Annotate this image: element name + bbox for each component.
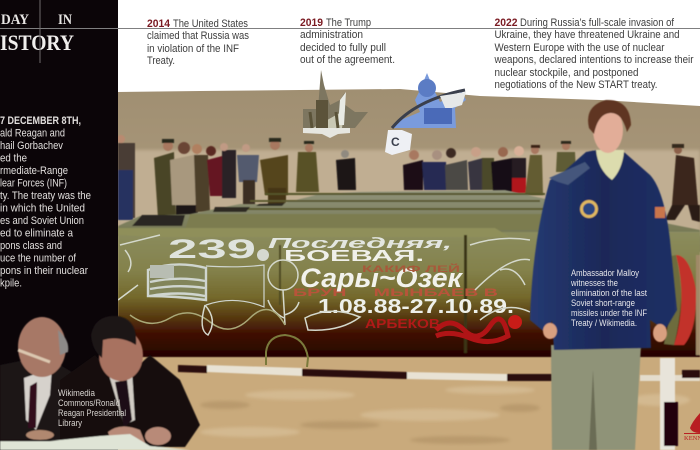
sidebar body text: es and Soviet Union <box>0 215 84 227</box>
Gorbachev hand <box>26 430 54 440</box>
sidebar body text: ty. The treaty was the <box>0 190 91 202</box>
red cap <box>508 315 522 329</box>
header: DAY IN: DAY <box>1 12 29 28</box>
timeline entry 2014: The United States <box>173 18 248 30</box>
sidebar body text: 7 DECEMBER 8TH, <box>0 115 81 127</box>
background: sandy ground <box>118 350 700 450</box>
face <box>593 107 623 153</box>
header: DAY IN <box>1 12 72 28</box>
Gorbachev hair <box>58 330 68 355</box>
shadow between the legs <box>589 370 597 450</box>
timeline entry 2014: in violation of the INF <box>147 43 239 55</box>
cutout: US Capitol banknote: C <box>391 135 400 149</box>
timeline entry 2019: out of the agreement. <box>300 54 395 66</box>
sidebar body text: lear Forces (INF) <box>0 178 67 190</box>
timeline entry 2014: 2014 <box>147 18 171 30</box>
logo: red emblem <box>684 413 700 442</box>
dark sidebar panel <box>0 0 118 450</box>
Reagan tie <box>115 380 132 428</box>
header: DAY IN: IN <box>58 12 72 28</box>
Reagan face <box>99 329 143 381</box>
header: ISTORY: ISTORY <box>0 30 74 55</box>
missile stand <box>266 335 308 367</box>
sidebar body text: in which the United <box>0 202 85 214</box>
flag patch <box>655 207 665 218</box>
timeline entry 2014: claimed that Russia was <box>147 30 249 42</box>
main missile with graffiti <box>118 228 700 367</box>
timeline entry 2022: Western Europe with the use of nuclear <box>494 42 665 54</box>
Gorbachev body <box>0 360 78 440</box>
photo credit caption: Reagan Presidential <box>58 408 126 418</box>
photo credit caption <box>58 388 126 428</box>
timeline entry 2014 <box>147 18 249 67</box>
rear missiles <box>118 190 700 252</box>
graffiti: dates: 1.08.88-27.10.89. <box>318 296 514 318</box>
photo caption: Ambassador Malloy <box>570 268 648 328</box>
graffiti: number 239: 239 <box>168 234 256 264</box>
sidebar body text: rmediate-Range <box>0 165 68 177</box>
woman: Ambassador Malloy <box>530 100 677 450</box>
sidebar body text: kpile. <box>0 278 22 290</box>
neck and collar <box>594 150 624 190</box>
graffiti: flag <box>148 264 264 307</box>
timeline entry 2019: 2019 <box>300 17 323 29</box>
left hand <box>543 323 557 339</box>
cutout: Kremlin tower <box>303 70 368 138</box>
sidebar body text: hail Gorbachev <box>0 140 63 152</box>
graffiti: red scrawl: АРБЕКОВ <box>365 316 440 331</box>
sidebar body text: ed to eliminate a <box>0 228 74 240</box>
timeline entry 2022: negotiations of the New START treaty. <box>494 79 658 91</box>
timeline entry 2022: 2022 <box>494 17 518 29</box>
timeline entry 2019: administration <box>300 29 363 41</box>
sidebar body text: ald Reagan and <box>0 128 65 140</box>
Gorbachev glasses <box>18 350 50 362</box>
Reagan body <box>60 355 200 447</box>
sidebar body text: pons in their nuclear <box>0 265 88 277</box>
graffiti: flower and signatures <box>118 235 530 335</box>
photo caption: Ambassador Malloy: witnesses the <box>570 278 618 288</box>
timeline entry 2019: The Trump <box>326 17 371 29</box>
sidebar body text: uce the number of <box>0 252 77 264</box>
header rule <box>0 28 700 29</box>
graffiti: place name: Сары~Озек <box>300 263 463 293</box>
header vertical rule <box>40 0 41 63</box>
crowd of officials <box>117 135 700 222</box>
Reagan hands <box>108 426 146 445</box>
sidebar body text: ed the <box>0 152 27 164</box>
timeline entry 2022 <box>494 17 694 91</box>
jacket shoulder hood <box>549 162 590 185</box>
graffiti: red scribble <box>436 319 508 342</box>
trousers <box>551 345 641 450</box>
right hand <box>653 324 667 342</box>
jacket <box>530 150 677 350</box>
photo caption: Ambassador Malloy: Soviet short-range <box>571 298 635 308</box>
background: desert hill <box>118 89 700 360</box>
photo caption: Ambassador Malloy: missiles under the INF <box>571 308 648 318</box>
photo credit caption: Commons/Ronald <box>58 398 120 408</box>
photo caption: Ambassador Malloy: Treaty / Wikimedia. <box>571 318 637 328</box>
Gorbachev shirt <box>24 368 52 430</box>
Reagan shirt <box>108 370 135 425</box>
Gorbachev head <box>18 317 66 377</box>
timeline entry 2019: decided to fully pull <box>300 42 386 54</box>
timeline entry 2019 <box>300 17 395 66</box>
timeline entry 2022: nuclear stockpile, and postponed <box>494 67 638 79</box>
signing book <box>0 434 190 450</box>
graffiti: handprint <box>257 249 269 261</box>
photo: Gorbachev and Reagan signing <box>0 316 200 450</box>
photo caption: Ambassador Malloy: elimination of the last <box>571 288 648 298</box>
graffiti: БОЕВАЯ: БОЕВАЯ. <box>284 248 424 265</box>
timeline entry 2014: Treaty. <box>147 55 175 67</box>
photo caption: Ambassador Malloy: Ambassador Malloy <box>571 268 640 278</box>
hair <box>588 100 631 134</box>
Gorbachev tie <box>28 382 37 428</box>
photo credit caption: Library <box>58 418 83 428</box>
Reagan hair <box>91 316 136 358</box>
jacket seal patch <box>580 200 598 218</box>
sidebar body text <box>0 115 91 290</box>
sidebar body text: pons class and <box>0 240 62 252</box>
photo credit caption: Wikimedia <box>58 388 95 398</box>
graffiti: slogan Последняя: Последняя, <box>268 235 452 252</box>
graffiti: upper red name: КАКИФ ЛЕЙ <box>362 263 460 274</box>
cutout: US Capitol banknote <box>385 73 466 155</box>
graffiti: red names: БРУН МЫНБАЕВ В <box>293 287 498 299</box>
barrier rail <box>178 358 700 450</box>
timeline entry 2022: During Russia’s full-scale invasion of <box>520 17 675 29</box>
